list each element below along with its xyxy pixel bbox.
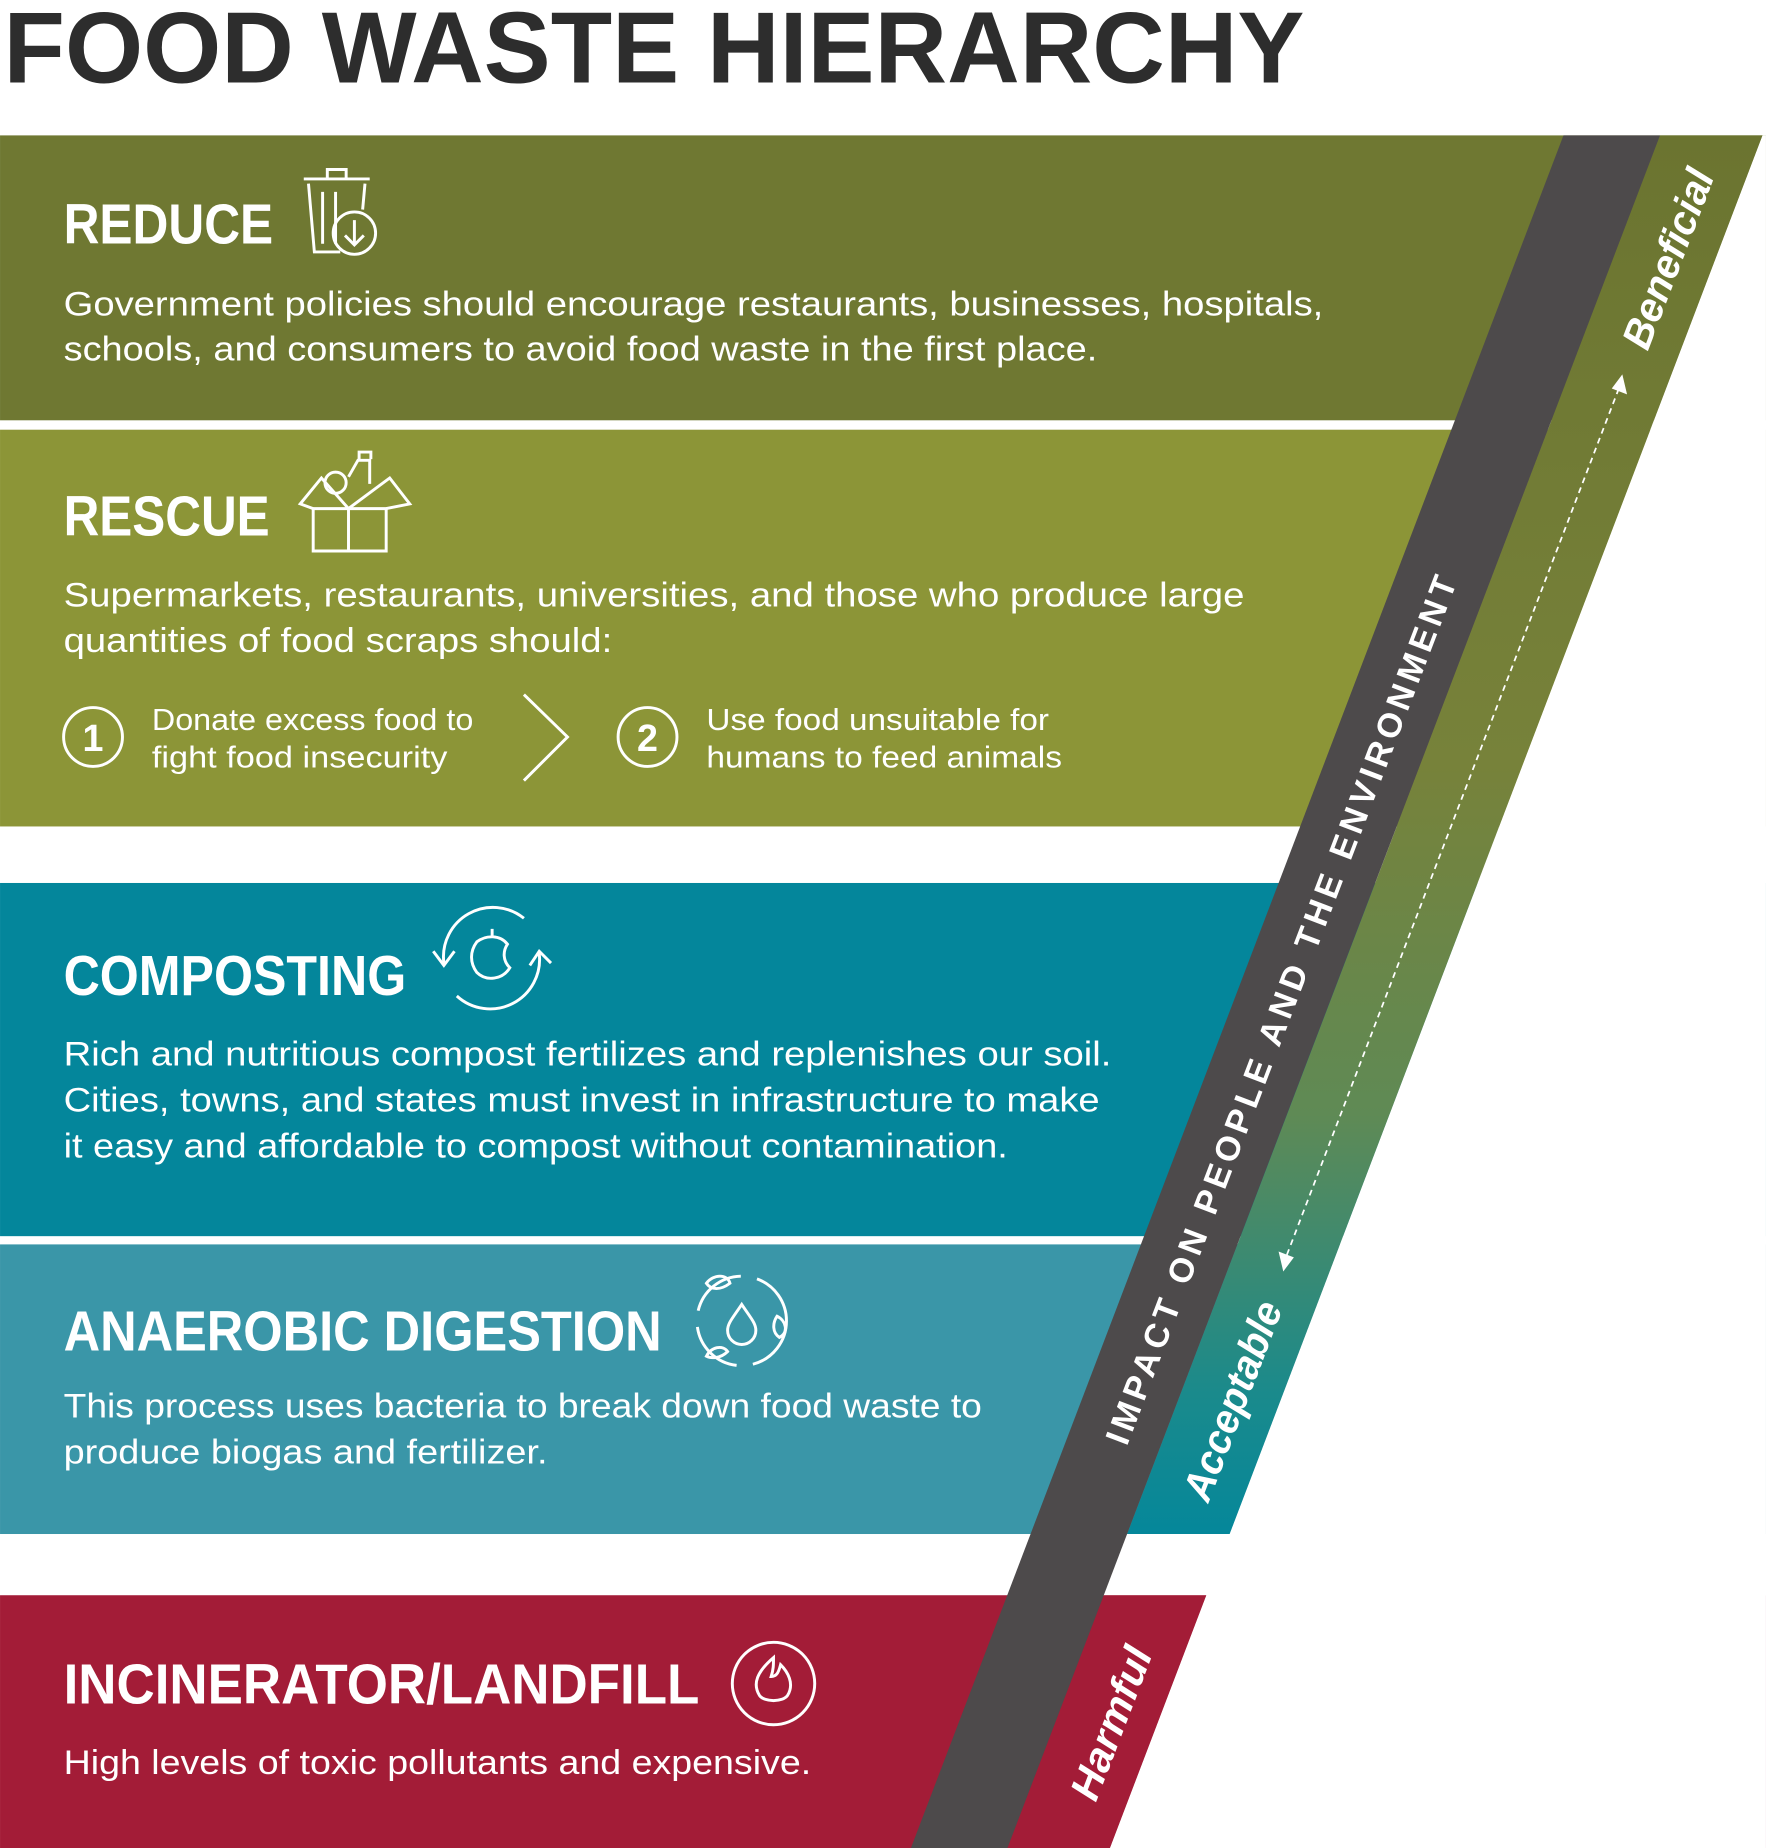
step 2: 2 <box>637 717 658 759</box>
text: reduce body: schools, and consumers to avoid food waste in the first place. <box>64 330 1097 368</box>
label: harmful: Harmful <box>1061 1639 1162 1806</box>
icon: flame <box>732 1642 815 1725</box>
step 2: Use food unsuitable for <box>706 703 1049 737</box>
icon: compost cycle <box>433 907 551 1009</box>
icon: trash can <box>304 170 376 254</box>
label: acceptable: Acceptable <box>1173 1295 1291 1508</box>
step 1: Donate excess food to <box>152 703 473 737</box>
side strip: harmful <box>1007 1595 1206 1848</box>
arrow: dashed scale <box>1279 374 1627 1271</box>
stripe: impact on people and the environment: IMPACT ON PEOPLE AND THE ENVIRONMENT <box>1099 567 1466 1450</box>
heading: rescue: RESCUE <box>64 485 270 548</box>
panel: composting <box>0 883 1766 1236</box>
panel: rescue <box>0 430 1766 826</box>
icon: box <box>300 452 410 551</box>
panel: incinerator/landfill <box>0 1595 1766 1848</box>
panel: anaerobic digestion <box>0 1244 1766 1534</box>
text: anaerobic body: produce biogas and fertilizer. <box>64 1433 547 1471</box>
text: composting body: Cities, towns, and states must invest in infrastructure to make <box>64 1081 1100 1119</box>
step 2: humans to feed animals <box>706 741 1062 775</box>
side strip: impact scale <box>1127 135 1762 1534</box>
step 1 <box>64 703 473 775</box>
icon: digestion cycle <box>697 1276 786 1366</box>
text: anaerobic body: This process uses bacteria to break down food waste to <box>64 1387 982 1425</box>
arrow: chevron <box>524 695 567 781</box>
step 2 <box>618 703 1062 775</box>
text: composting body: Rich and nutritious compost fertilizes and replenishes our soil. <box>64 1035 1111 1073</box>
heading: anaerobic: ANAEROBIC DIGESTION <box>64 1299 662 1362</box>
text: reduce body: Government policies should encourage restaurants, businesses, hospitals, <box>64 286 1323 324</box>
text: rescue body: Supermarkets, restaurants, universities, and those who produce large <box>64 576 1244 614</box>
step 1: fight food insecurity <box>152 741 448 775</box>
text: rescue body: quantities of food scraps should: <box>64 622 612 660</box>
panel: reduce <box>0 135 1766 420</box>
text: composting body: it easy and affordable to compost without contamination. <box>64 1127 1008 1165</box>
step 1: 1 <box>83 717 104 759</box>
label: beneficial: Beneficial <box>1613 161 1724 355</box>
heading: reduce: REDUCE <box>64 193 273 256</box>
heading: composting: COMPOSTING <box>64 944 406 1007</box>
text: incinerator body: High levels of toxic pollutants and expensive. <box>64 1744 811 1782</box>
heading: incinerator: INCINERATOR/LANDFILL <box>64 1653 699 1716</box>
